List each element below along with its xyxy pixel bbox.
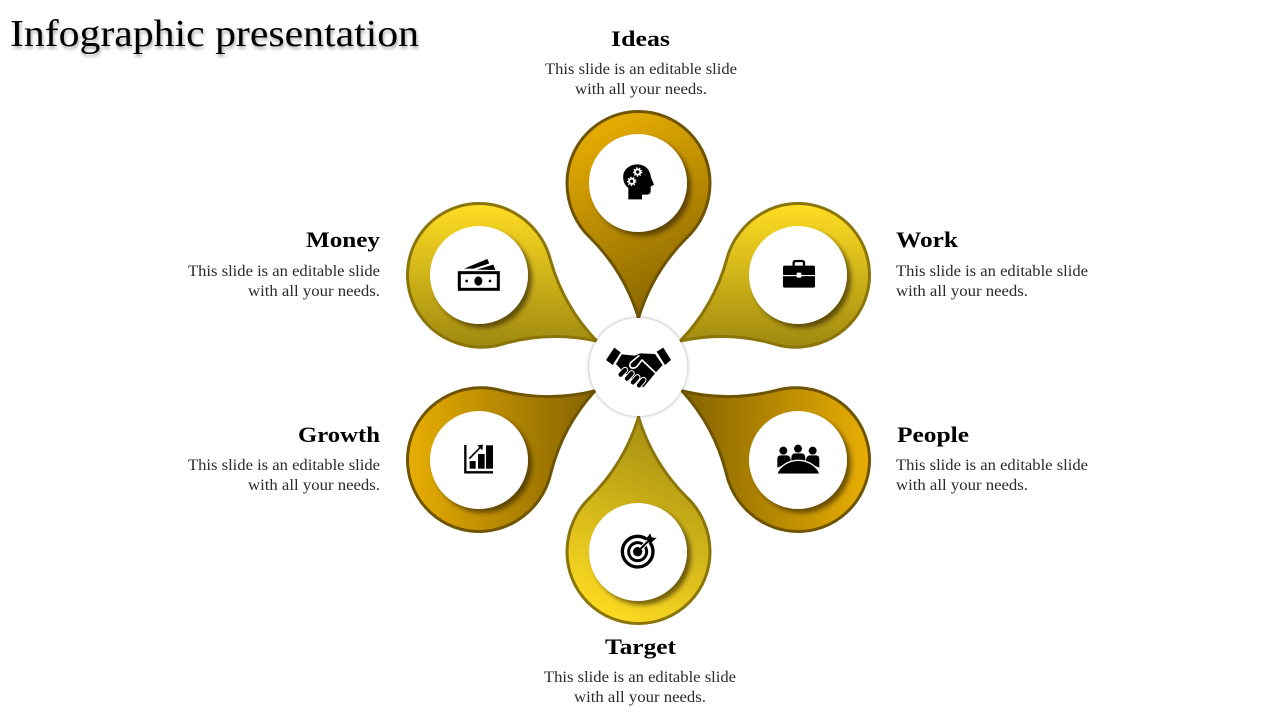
- description: ideas: [545, 61, 737, 98]
- description: work: [896, 263, 1088, 300]
- white circle: target: [589, 503, 687, 601]
- description: money: with all your needs.: [248, 283, 380, 300]
- panel: growth petal: [381, 329, 632, 558]
- icon: handshake: [606, 348, 671, 387]
- white circle: work: [749, 226, 847, 324]
- heading: ideas: Ideas: [611, 26, 671, 51]
- teardrop: work: [645, 178, 895, 403]
- white circle: people: [749, 411, 847, 509]
- icon: head with gears: [623, 164, 654, 199]
- teardrop: ideas: [567, 112, 710, 318]
- description: people: [896, 457, 1088, 494]
- teardrop: money: [382, 178, 632, 403]
- description: target: with all your needs.: [574, 689, 706, 706]
- text block: people: [896, 422, 1088, 494]
- description: work: with all your needs.: [896, 283, 1028, 300]
- title: Infographic presentation: [10, 13, 419, 55]
- text block: growth: [188, 422, 380, 494]
- white circle: growth: [430, 411, 528, 509]
- panel: target petal: [567, 417, 710, 624]
- description: people: This slide is an editable slide: [896, 457, 1088, 474]
- description: people: with all your needs.: [896, 477, 1028, 494]
- text block: work: [896, 227, 1088, 300]
- description: ideas: This slide is an editable slide: [545, 61, 737, 78]
- text block: money: [188, 227, 380, 300]
- heading: target: Target: [605, 634, 677, 659]
- description: growth: This slide is an editable slide: [188, 457, 380, 474]
- panel: ideas petal: [567, 112, 710, 318]
- icon: briefcase: [783, 261, 815, 288]
- heading: people: People: [897, 422, 969, 447]
- heading: growth: Growth: [298, 422, 380, 447]
- heading: work: Work: [896, 227, 959, 252]
- description: money: [188, 263, 380, 300]
- teardrop: people: [645, 329, 896, 558]
- white circle: ideas: [589, 134, 687, 232]
- description: growth: [188, 457, 380, 494]
- text block: ideas: [545, 26, 737, 98]
- description: money: This slide is an editable slide: [188, 263, 380, 280]
- teardrop: growth: [381, 329, 632, 558]
- icon: banknotes: [459, 259, 498, 289]
- panel: work petal: [645, 178, 895, 403]
- description: growth: with all your needs.: [248, 477, 380, 494]
- teardrop: target: [567, 417, 710, 624]
- heading: money: Money: [306, 227, 380, 252]
- icon: bar chart with arrow: [465, 445, 493, 472]
- text block: target: [544, 634, 736, 706]
- white circle: money: [430, 226, 528, 324]
- description: target: [544, 669, 736, 706]
- description: ideas: with all your needs.: [575, 81, 707, 98]
- description: target: This slide is an editable slide: [544, 669, 736, 686]
- icon: people around table: [775, 445, 822, 476]
- panel: people petal: [645, 329, 896, 558]
- description: work: This slide is an editable slide: [896, 263, 1088, 280]
- center circle: [589, 318, 687, 416]
- icon: target with arrow: [622, 533, 657, 567]
- panel: money petal: [382, 178, 632, 403]
